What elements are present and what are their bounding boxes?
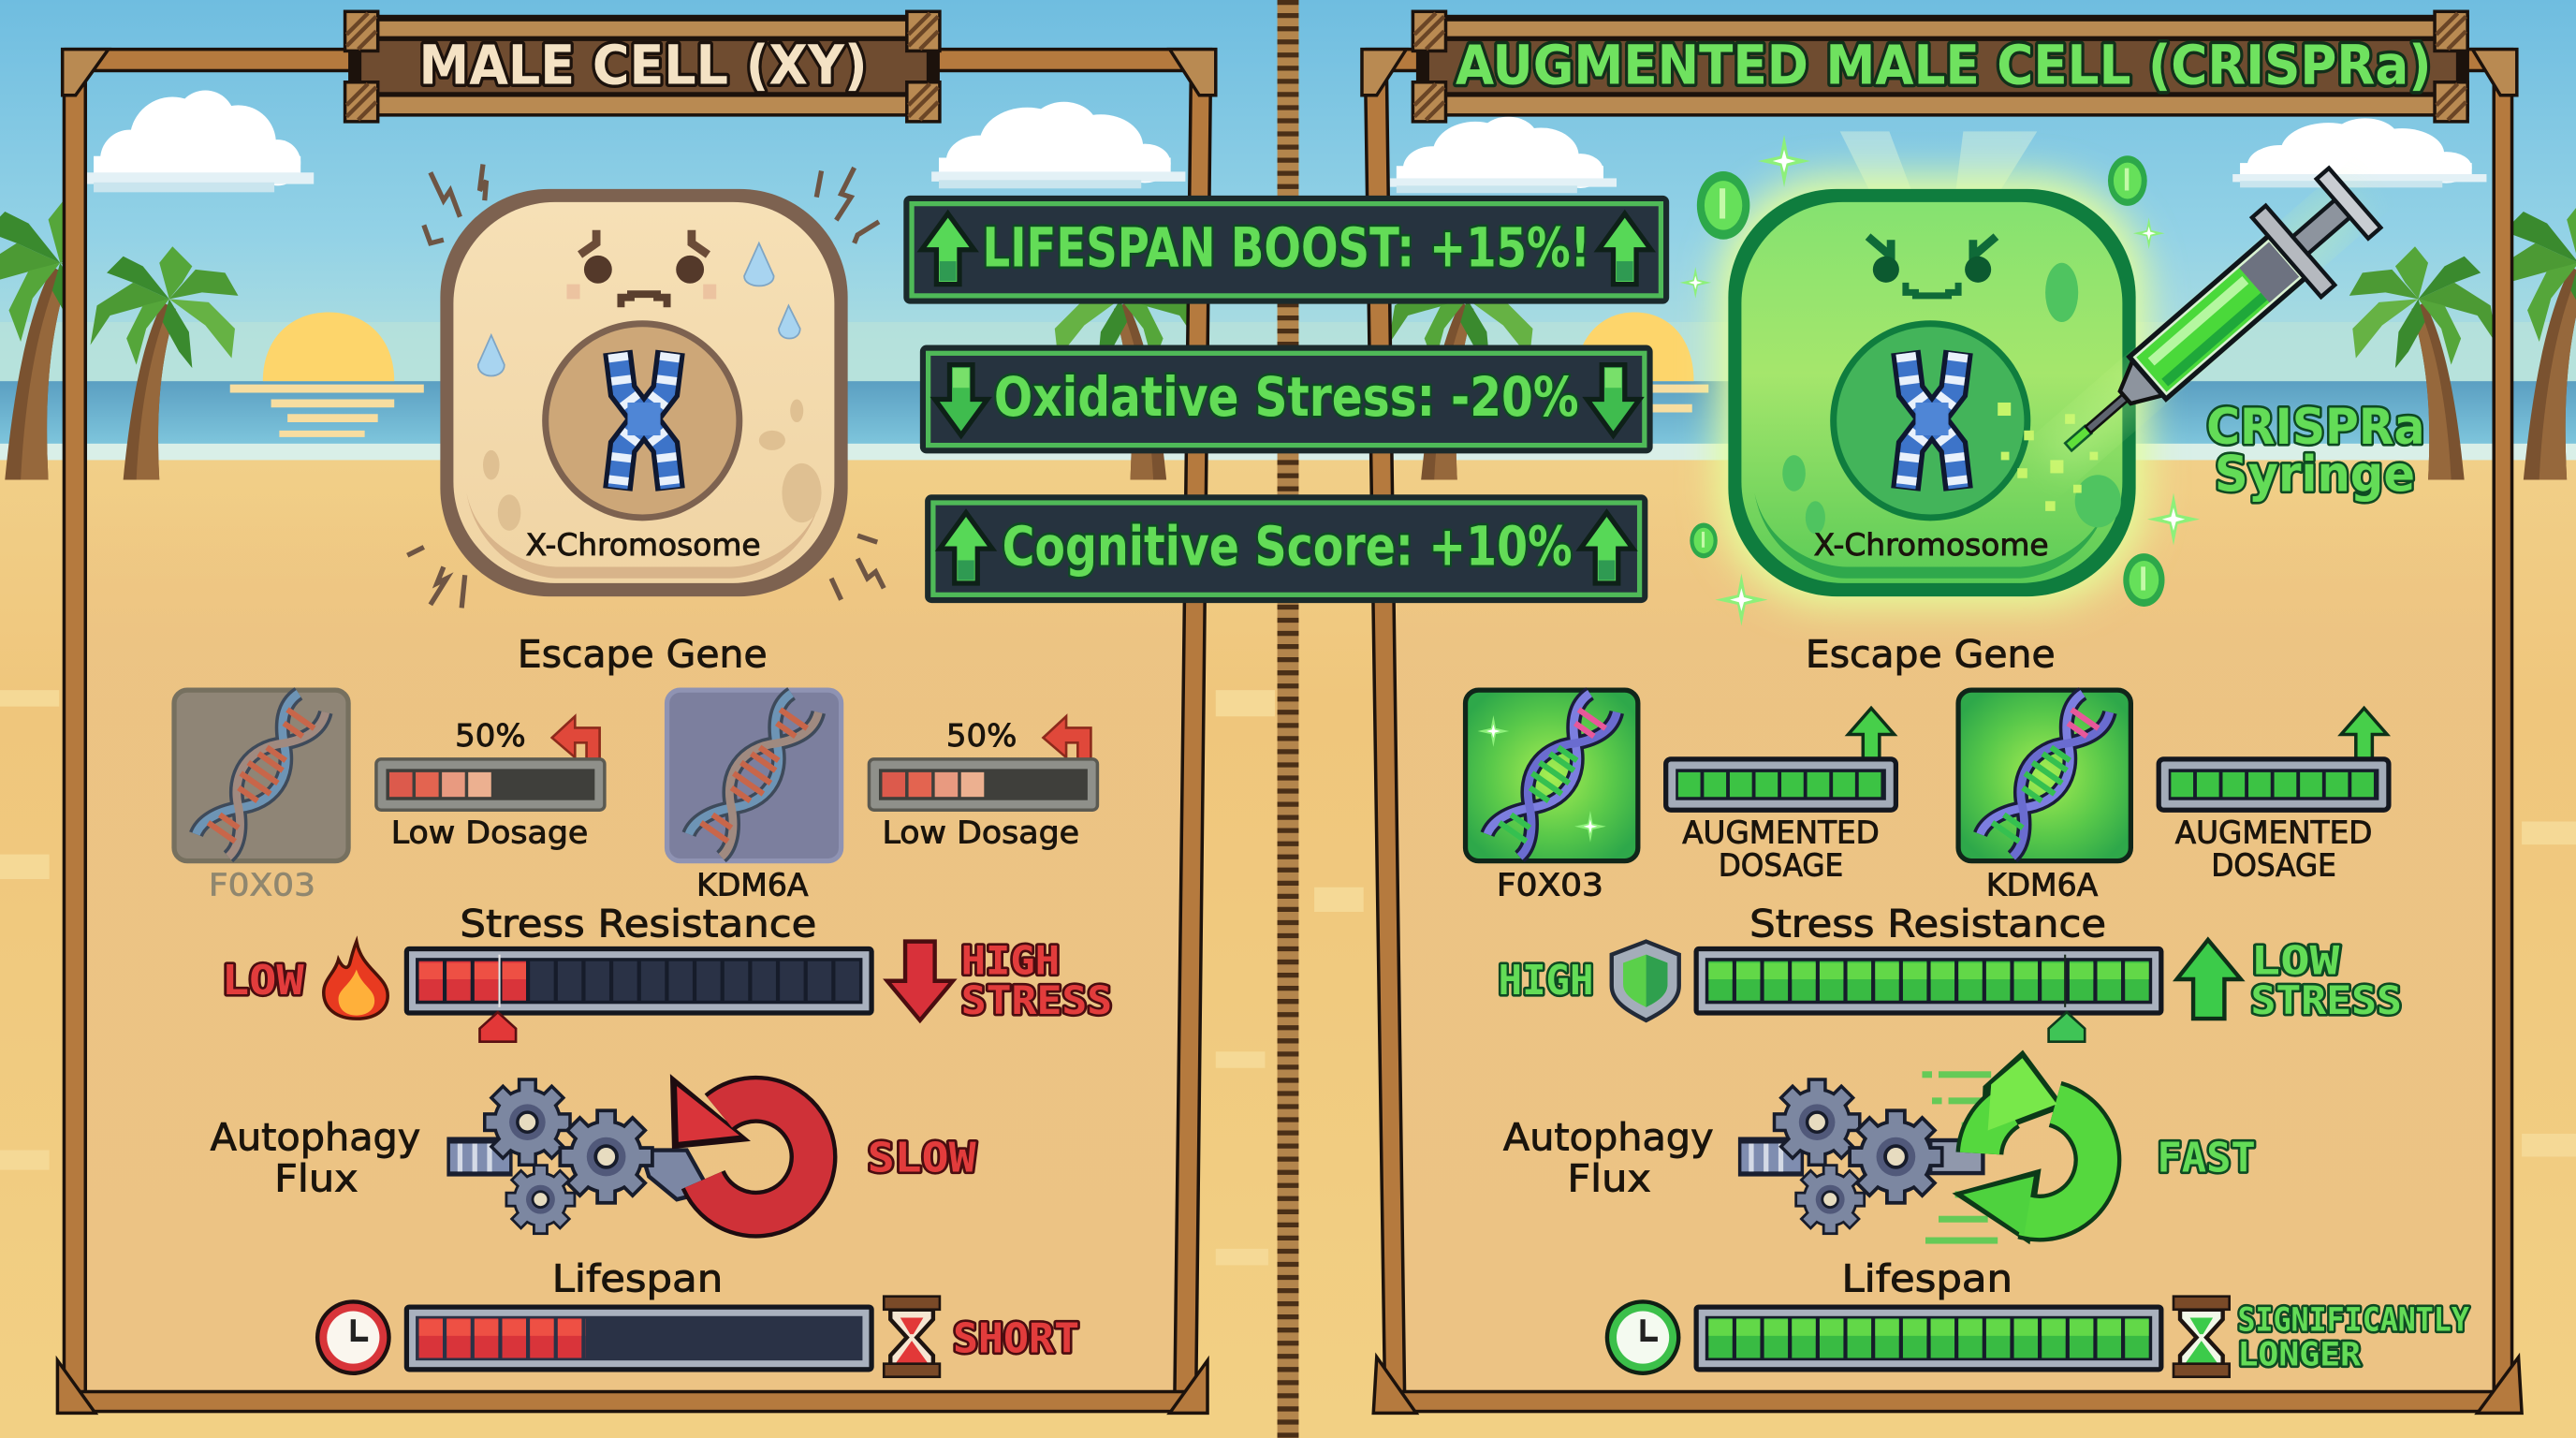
stress text: Oxidative Stress: -20% <box>994 365 1579 429</box>
arrow up right <box>1580 513 1633 583</box>
cognitive text: Cognitive Score: +10% <box>1003 515 1573 579</box>
significantly longer label <box>2237 1301 2469 1373</box>
up arrow: low stress <box>2177 940 2241 1019</box>
lifespan bar: short <box>404 1304 874 1372</box>
injection sparkle <box>1998 403 2098 511</box>
arrow up right <box>1599 213 1651 285</box>
right sun <box>1569 312 1708 413</box>
CRISPRa syringe label: CRISPRa <box>2206 399 2425 456</box>
autophagy flux label <box>1503 1116 1714 1200</box>
x-chromosome label: X-Chromosome <box>1814 529 2049 563</box>
flame core <box>339 969 374 1016</box>
dosage label line 2: DOSAGE <box>2211 846 2336 883</box>
arrow up left <box>922 213 974 285</box>
parchment background <box>85 493 1191 1397</box>
title text: AUGMENTED MALE CELL (CRISPRa) <box>1456 34 2432 97</box>
fast label: FAST <box>2157 1134 2256 1181</box>
short label: SHORT <box>953 1314 1079 1362</box>
autophagy diagram: fast <box>1738 1055 2098 1244</box>
green circular arrows <box>2024 1104 2098 1218</box>
50 percent label: 50% <box>946 717 1017 754</box>
title board: augmented <box>1412 10 2469 124</box>
parchment background <box>1386 493 2494 1397</box>
FOXO3 label: F0X03 <box>209 866 315 902</box>
red circular arrow <box>703 1099 813 1214</box>
low dosage label: Low Dosage <box>391 814 588 850</box>
x-chromosome label: X-Chromosome <box>526 529 761 563</box>
return arrow <box>552 716 600 759</box>
title text: MALE CELL (XY) <box>419 34 868 97</box>
high stress label <box>961 938 1112 1023</box>
stressed tan cell <box>407 165 884 608</box>
icon: shield <box>1612 942 1679 1020</box>
low stress label: STRESS <box>2250 977 2402 1023</box>
stress bar: high <box>1694 946 2163 1016</box>
stress sparks <box>407 165 884 608</box>
sparkles and gems <box>1679 135 2200 626</box>
dosage bar: FOXO3 <box>376 716 605 850</box>
significantly longer label: LONGER <box>2237 1335 2362 1373</box>
boost text: LIFESPAN BOOST: +15%! <box>983 215 1590 279</box>
autophagy flux label: Flux <box>274 1156 359 1200</box>
up arrow <box>1848 708 1895 759</box>
autophagy flux label: Flux <box>1567 1156 1651 1200</box>
panel: male cell <box>57 10 1216 1413</box>
KDM6A label: KDM6A <box>696 866 809 902</box>
x-chromosome <box>1906 352 1958 490</box>
up arrow <box>2341 708 2387 759</box>
lifespan bar: long <box>1694 1304 2163 1372</box>
callout: oxidative stress <box>922 346 1651 452</box>
happy face <box>1868 237 1996 296</box>
palm trees <box>0 199 2576 479</box>
input pipe <box>1738 1137 1804 1177</box>
arrow down right <box>1587 365 1640 435</box>
nucleus <box>542 320 742 521</box>
gears <box>1773 1078 1862 1167</box>
sweat drops <box>478 243 800 375</box>
syringe <box>2019 158 2390 500</box>
glow <box>1719 178 2146 606</box>
callout: lifespan boost <box>905 198 1667 302</box>
speed lines <box>1922 1071 1998 1244</box>
organelles <box>1782 263 2121 534</box>
significantly longer label: SIGNIFICANTLY <box>2237 1301 2469 1340</box>
CRISPRa syringe label <box>2206 399 2425 504</box>
nucleus <box>1830 320 2030 521</box>
escape gene heading: Escape Gene <box>1806 633 2056 677</box>
low stress label <box>2250 938 2402 1023</box>
autophagy flux label <box>211 1116 420 1200</box>
autophagy diagram: slow <box>446 1078 813 1235</box>
center rope divider <box>1278 0 1298 1438</box>
escape gene heading: Escape Gene <box>518 633 768 677</box>
dosage bar: KDM6A augmented <box>2159 708 2389 850</box>
stress resistance heading: Stress Resistance <box>1749 902 2106 946</box>
icon: flame <box>324 942 388 1019</box>
slow label: SLOW <box>868 1134 976 1181</box>
icon: clock <box>1605 1299 1680 1375</box>
glowing green cell <box>1679 131 2200 626</box>
autophagy flux label: Autophagy <box>1503 1116 1714 1160</box>
marker: high <box>2049 1012 2085 1042</box>
icon: hourglass <box>884 1297 940 1377</box>
callout: cognitive score <box>927 496 1647 601</box>
gene tile: KDM6A boosted <box>1958 690 2130 902</box>
low stress label: LOW <box>2250 938 2340 984</box>
wooden frame <box>1362 50 2522 1413</box>
left sun <box>230 312 424 437</box>
input pipe <box>446 1137 513 1177</box>
high stress label: STRESS <box>961 977 1112 1023</box>
icon: hourglass <box>2174 1297 2230 1377</box>
worried face <box>567 230 716 307</box>
arrow down left <box>935 365 988 435</box>
icon: clock <box>315 1299 391 1375</box>
dosage label line 2: DOSAGE <box>1719 846 1843 883</box>
output channel <box>640 1151 710 1199</box>
CRISPRa syringe label: Syringe <box>2215 447 2415 504</box>
marker: low <box>479 1012 516 1042</box>
arrow up left <box>940 513 992 583</box>
low dosage label: Low Dosage <box>882 814 1079 850</box>
title board: male cell <box>344 10 942 124</box>
gears <box>483 1078 572 1167</box>
return arrow <box>1043 716 1090 759</box>
lifespan heading: Lifespan <box>552 1256 723 1300</box>
FOXO3 label: F0X03 <box>1497 866 1603 902</box>
stress bar: low <box>404 946 874 1016</box>
organelles <box>483 399 822 531</box>
light rays <box>1840 131 2037 198</box>
lifespan heading: Lifespan <box>1841 1256 2012 1300</box>
low label: LOW <box>222 957 304 1005</box>
gene tile: KDM6A <box>667 690 842 902</box>
dosage bar: KDM6A <box>869 716 1097 850</box>
high label: HIGH <box>1499 957 1593 1005</box>
KDM6A label: KDM6A <box>1986 866 2098 902</box>
high stress label: HIGH <box>961 938 1060 984</box>
50 percent label: 50% <box>455 717 526 754</box>
augmented dosage label: AUGMENTED <box>1682 814 1880 850</box>
gene tile: FOXO3 boosted <box>1466 690 1638 902</box>
stress resistance heading: Stress Resistance <box>460 902 816 946</box>
clouds <box>87 91 2486 193</box>
down arrow: high stress <box>887 942 953 1020</box>
output channel <box>1930 1140 1983 1173</box>
gene tile: FOXO3 <box>174 690 348 902</box>
dosage bar: FOXO3 augmented <box>1666 708 1895 850</box>
x-chromosome <box>618 352 670 490</box>
autophagy flux label: Autophagy <box>211 1116 420 1160</box>
panel: augmented male cell <box>1362 10 2522 1413</box>
wooden frame <box>57 50 1216 1413</box>
augmented dosage label: AUGMENTED <box>2175 814 2372 850</box>
